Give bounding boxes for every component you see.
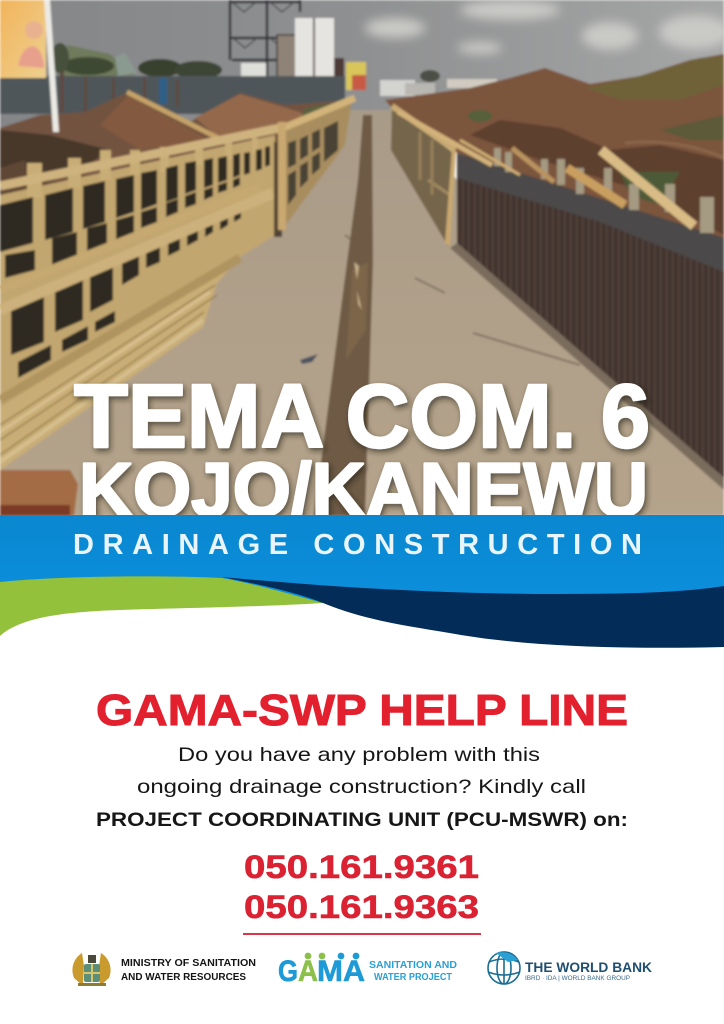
main title [72,382,654,515]
distant buildings [380,70,497,96]
ministry name: AND WATER RESOURCES [121,971,246,983]
ministry name [121,957,256,983]
brick edge [0,470,78,516]
phone numbers: 050.161.9363 [244,889,479,925]
logo: GAMA: A [343,955,365,988]
back formwork [274,98,355,237]
timber pile [0,260,238,470]
logo: World Bank globe [488,952,520,984]
navy wave [222,577,724,648]
leaning plank [127,92,218,138]
project name: WATER PROJECT [374,971,452,983]
central channel [314,115,373,516]
help line section [96,686,628,935]
footer logos [72,952,652,988]
subtitle: DRAINAGE CONSTRUCTION [73,529,642,561]
floor shadows [345,235,580,365]
help text: PROJECT COORDINATING UNIT (PCU-MSWR) on: [96,809,628,831]
left fence [0,76,345,114]
help text: ongoing drainage construction? Kindly call [137,776,586,798]
white lower background [0,600,724,1024]
steel reinforced wall [450,153,724,490]
sky [0,0,724,130]
project name: SANITATION AND [369,959,457,971]
left formwork [0,128,280,408]
logo: GAMA [278,953,365,988]
ministry name: MINISTRY OF SANITATION [121,957,256,969]
left soil mounds [0,92,336,187]
help line heading: GAMA-SWP HELP LINE [96,686,628,735]
blue band [0,515,724,615]
clouds [365,0,724,54]
World Bank name: IBRD · IDA | WORLD BANK GROUP [525,976,630,982]
logo: GAMA: M [317,955,343,988]
construction site photo [0,0,724,533]
help text [96,744,628,831]
left billboard [0,0,59,132]
help text: Do you have any problem with this [178,744,540,766]
posts and planks [398,112,714,233]
phone numbers [244,849,479,925]
right formwork [391,106,456,246]
World Bank name: THE WORLD BANK [525,960,652,975]
title line 2: KOJO/KANEWU [79,448,648,533]
billboards [230,0,366,90]
logo: Ghana coat of arms [72,953,111,986]
red rule [243,933,481,935]
World Bank name [525,960,652,982]
concrete floor [0,110,724,516]
green wave [0,576,323,636]
title line 1: TEMA COM. 6 [74,367,650,467]
project name [369,959,457,983]
logo: GAMA: G [278,955,298,988]
logo: GAMA: A [298,955,318,988]
right soil hill [385,54,724,250]
trees and house [51,43,222,79]
phone numbers: 050.161.9361 [244,849,479,885]
